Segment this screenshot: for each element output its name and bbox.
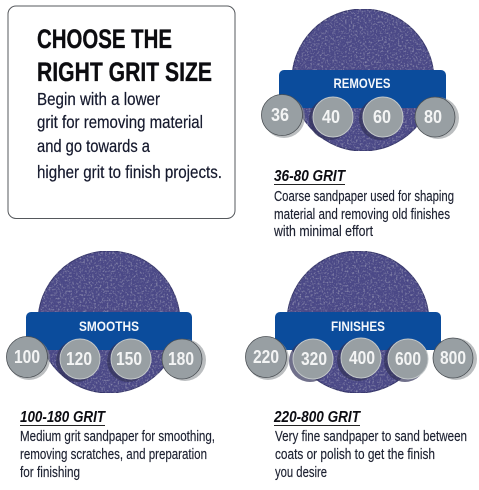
sanding disc: [292, 9, 434, 151]
grit chip: 220: [246, 336, 289, 380]
intro text: grit for removing material: [37, 112, 203, 132]
heading: 36-80 grit: 36-80 GRIT: [274, 168, 346, 185]
description: 36-80 grit: with minimal effort: [273, 224, 373, 240]
grit chip: 320: [289, 339, 333, 382]
grit chip: 150: [107, 339, 151, 382]
title: CHOOSE THE: [37, 24, 172, 54]
grit chip: 60: 60: [373, 107, 391, 127]
intro text: [37, 89, 222, 182]
description: 36-80 grit: [273, 189, 454, 240]
intro text: and go towards a: [37, 136, 150, 156]
description: 220-800 grit: [275, 429, 467, 481]
banner: finishes: [275, 312, 441, 350]
grit chip: 120: [56, 339, 100, 382]
grit chip: 600: 600: [395, 349, 421, 369]
description: 100-180 grit: removing scratches, and preparation: [20, 447, 207, 463]
grit chip: 220: 220: [253, 347, 279, 367]
banner: smooths: [26, 312, 192, 350]
grit chip: 150: 150: [116, 349, 142, 369]
banner: removes: [279, 70, 446, 108]
title: [37, 24, 212, 87]
grit chip: 600: [384, 339, 428, 382]
grit chip: 100: [6, 336, 50, 380]
grit chip: 40: [309, 97, 353, 140]
banner: finishes: FINISHES: [331, 318, 385, 334]
grit chip: 120: 120: [66, 349, 92, 369]
grit chip: 60: [359, 97, 403, 140]
panel: smooths: [6, 251, 215, 481]
grit chip: 800: 800: [440, 348, 466, 368]
title: RIGHT GRIT SIZE: [37, 57, 212, 87]
sanding disc: [38, 251, 180, 393]
description: 220-800 grit: coats or polish to get the finish: [275, 447, 435, 463]
banner: removes: REMOVES: [334, 75, 390, 91]
grit chip: 80: [415, 97, 459, 139]
grit chip: 36: 36: [271, 105, 289, 125]
grit chip: 400: [337, 338, 381, 381]
intro text: Begin with a lower: [37, 89, 160, 109]
intro text: higher grit to finish projects.: [37, 162, 222, 182]
grit chip: 36: [262, 94, 305, 138]
grit chip: 320: 320: [301, 349, 327, 369]
sanding disc: [287, 251, 429, 393]
banner: smooths: SMOOTHS: [79, 318, 139, 334]
grit chip: 80: 80: [424, 107, 442, 127]
grit chip: 100: 100: [14, 347, 40, 367]
panel: finishes: [246, 251, 477, 481]
description: 100-180 grit: for finishing: [20, 465, 80, 481]
panel: intro box: [8, 6, 235, 218]
panel: removes: [262, 9, 459, 240]
grit chip: 400: 400: [349, 348, 375, 368]
grit chip: 40: 40: [322, 107, 340, 127]
heading: 100-180 grit: 100-180 GRIT: [20, 409, 106, 426]
heading: 220-800 grit: 220-800 GRIT: [273, 409, 361, 426]
grit chip: 180: [162, 339, 206, 381]
description: 220-800 grit: you desire: [275, 465, 327, 481]
grit chip: 180: 180: [168, 349, 194, 369]
description: 100-180 grit: [20, 429, 215, 481]
description: 100-180 grit: Medium grit sandpaper for smoothing,: [20, 429, 215, 445]
grit chip: 800: [433, 338, 477, 380]
